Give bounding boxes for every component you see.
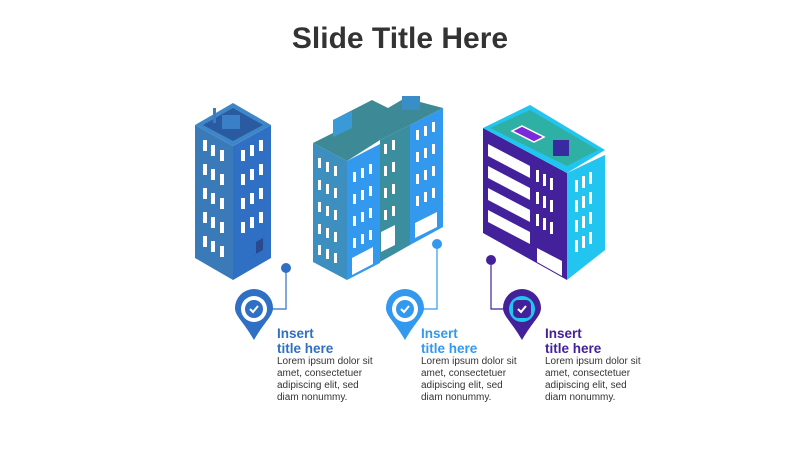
building 2 (313, 96, 443, 280)
text: diam nonummy. (277, 392, 347, 403)
text 2 (421, 326, 517, 403)
text: title here (421, 341, 477, 356)
text: Lorem ipsum dolor sit (545, 356, 641, 367)
pin 2 (386, 289, 424, 340)
building 1 (195, 103, 271, 280)
text: Lorem ipsum dolor sit (277, 356, 373, 367)
text 3 (545, 326, 641, 403)
text: Lorem ipsum dolor sit (421, 356, 517, 367)
text: title here (545, 341, 601, 356)
text: Insert (421, 326, 458, 341)
text: adipiscing elit, sed (277, 380, 359, 391)
text: title here (277, 341, 333, 356)
text: amet, consectetuer (421, 368, 506, 379)
title: Slide Title Here (292, 22, 508, 55)
text: adipiscing elit, sed (545, 380, 627, 391)
connector 1 (268, 263, 291, 309)
text: adipiscing elit, sed (421, 380, 503, 391)
text 1 (277, 326, 373, 403)
text: amet, consectetuer (277, 368, 362, 379)
text: amet, consectetuer (545, 368, 630, 379)
text: Insert (545, 326, 582, 341)
connector 2 (420, 239, 442, 309)
building 3 (483, 105, 605, 280)
text: diam nonummy. (545, 392, 615, 403)
text: diam nonummy. (421, 392, 491, 403)
pin 3 (503, 289, 541, 340)
connector 3 (486, 255, 508, 309)
pin 1 (235, 289, 273, 340)
text: Insert (277, 326, 314, 341)
